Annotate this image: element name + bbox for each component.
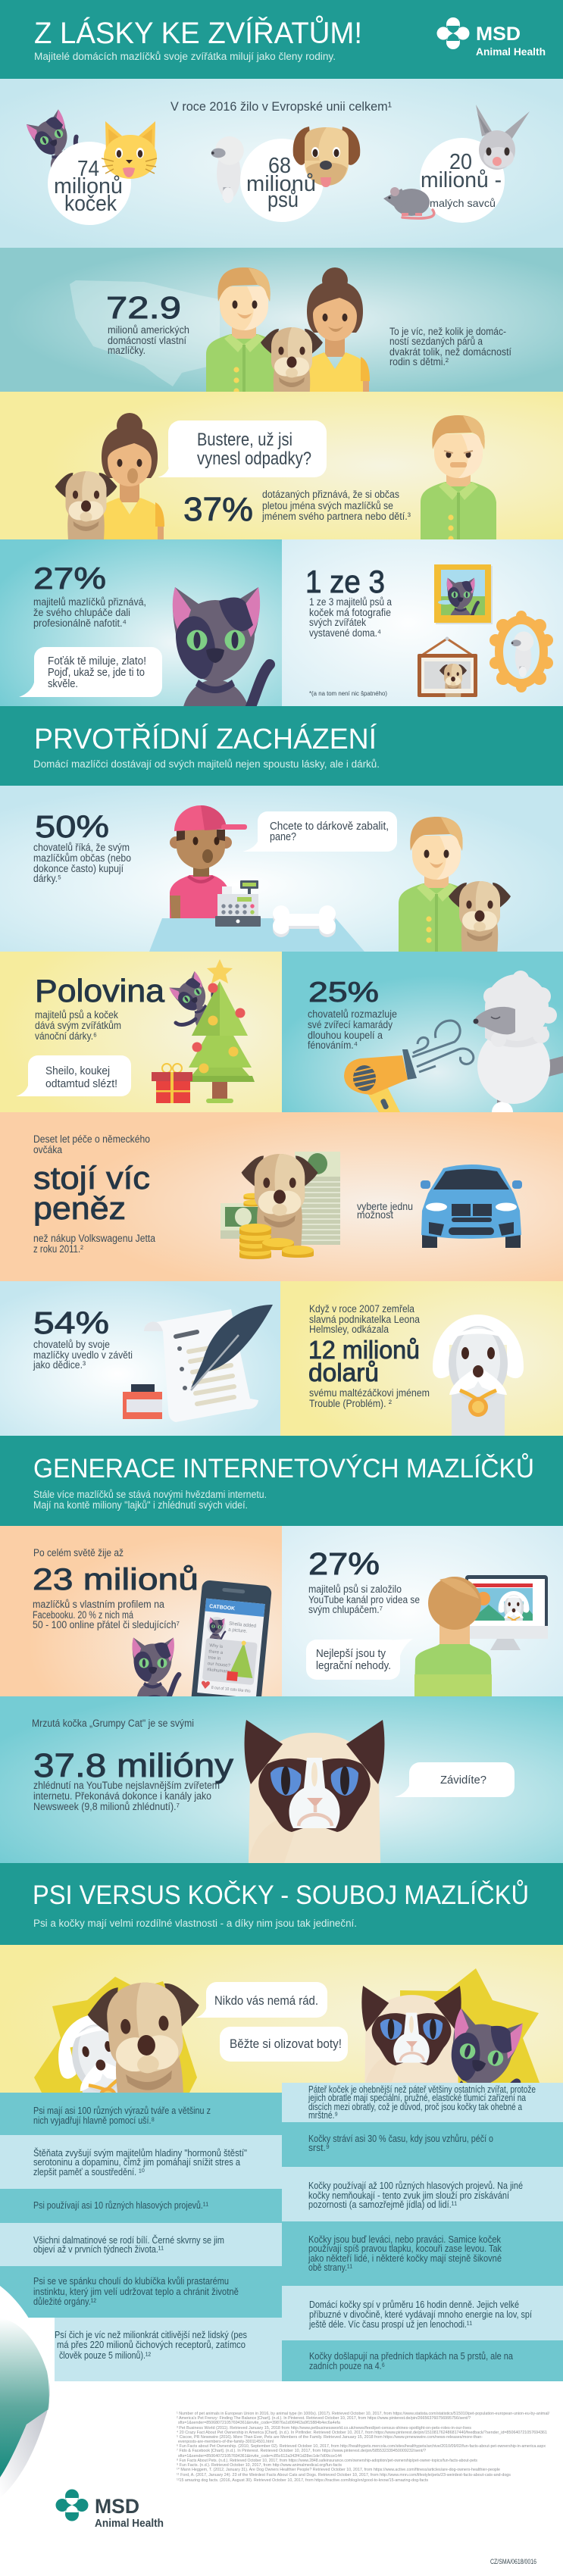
figure: maltese <box>49 2006 158 2151</box>
text: dog expressions: nich vyjadřují hlavně pomocí uší.⁸ <box>33 2115 155 2126</box>
text: 12 million dollars: Helmsley, odkázala <box>309 1324 389 1335</box>
text: comparison with households <box>389 326 511 367</box>
references list: sfts=1&sender=850680721057694361&invite_code=39876a1d06f463a9f15884b4ec6a4efa <box>178 2421 340 2425</box>
logo: MSD Animal Health: MSD <box>476 23 521 45</box>
stat: 20 million small mammals: malých savců <box>430 197 496 209</box>
stat: 23 million: Facebooku. 20 % z nich má <box>33 1609 133 1621</box>
stat: 50%: 50% <box>35 809 109 844</box>
stat: 27% photos <box>33 562 146 629</box>
panel: dogs versus cats duel <box>0 1945 563 2151</box>
text: comparison with households: rodin s dětmi.² <box>389 356 449 367</box>
speech bubble: camera: Foťák tě miluje, zlato! <box>48 655 146 667</box>
stat: 1 in 3 <box>305 564 392 639</box>
icon: rabbit head <box>479 130 515 170</box>
stat: 20 million small mammals <box>421 150 502 209</box>
text: flexible spine <box>308 2084 536 2121</box>
text: toes: Kočky došlapují na předních tlapkách na 5 prstů, ale na <box>309 2351 513 2362</box>
text: sense of smell <box>55 2330 247 2361</box>
text: 12 million dollars: slavná podnikatelka Leona <box>309 1314 420 1325</box>
speech bubble: Bustere: Bustere, už jsi <box>197 430 292 450</box>
decoration: left star burst <box>34 1977 197 2093</box>
heading: GENERACE INTERNETOVÝCH MAZLÍČKŮ <box>33 1453 534 1483</box>
stat: 74 million cats <box>54 157 123 216</box>
references list: sfts=1&sender=850640721057694361&invite_code=c85c612a342f41d28ec1de7d09cce144 <box>178 2454 342 2459</box>
icon: phone with Catbook: Why is <box>209 1643 223 1649</box>
panel: section header first-class treatment <box>0 706 563 786</box>
stat: half: dává svým zvířátkům <box>35 1020 121 1031</box>
panel: page header <box>0 0 563 79</box>
stat: 68 million dogs <box>246 154 316 212</box>
text: sleeping hours: Domácí kočky spí v průměru 16 hodin denně. Jejich velké <box>309 2299 519 2310</box>
subheading <box>33 1489 267 1511</box>
text: pick one option: možnost <box>357 1209 393 1221</box>
text: curling up <box>33 2276 239 2307</box>
speech bubble: Sheila <box>16 1055 131 1096</box>
text: dog vocalisations: Psi používají asi 10 různých hlasových projevů.¹¹ <box>33 2200 208 2211</box>
text: sense of smell: má přes 220 milionů čichových receptorů, zatímco <box>57 2340 246 2350</box>
speech bubble: funny accidents <box>306 1639 413 1680</box>
figure: cashier <box>170 805 247 918</box>
references list: evenposts-are-members-of-the-family-300114501.html <box>178 2440 274 2444</box>
stat: 72.9 million: mazlíčky. <box>108 345 145 356</box>
stat: 27% photos: profesionálně nafotit.⁴ <box>33 617 127 629</box>
panel: Grumpy Cat <box>0 1696 563 1863</box>
icon: phone with Catbook: a picture. <box>228 1627 248 1634</box>
panel: Christmas gifts <box>0 952 282 1112</box>
stat: 54%: jako dědice.³ <box>33 1359 86 1371</box>
icon: computer monitor <box>465 1575 548 1650</box>
stat: 50%: mazlíčkům občas (nebo <box>33 852 131 864</box>
stat: 20 million small mammals: milionů - <box>421 168 502 192</box>
speech bubble: funny accidents: Nejlepší jsou ty <box>316 1647 386 1660</box>
icon: phone with Catbook: our house? <box>208 1662 231 1668</box>
text: cat vocalisations <box>308 2181 523 2210</box>
text: curling up: důležité orgány.¹² <box>33 2296 96 2307</box>
icon: phone with Catbook: 8 out of 10 cats like this <box>211 1686 251 1694</box>
figure: maltese with medal <box>433 1315 524 1458</box>
references list: ³ Pet Business World (2011). Retrieved January 15, 2018 from http://www.petbusinessworld.co.uk/news/feed/pet-census-shines-spotlight-on-pets-roles-in-our-lives <box>177 2426 471 2431</box>
stat: 23 million <box>33 1547 199 1630</box>
references list: ¹¹ Ford, A. (2017, January 24). 23 of the Weirdest Facts About Cats and Dogs. Retrieved October 10, 2017, from http://www.mnn.com/lifestyle/pets/23-weirdest-facts-about-cats-and-dogs <box>177 2473 511 2478</box>
text: 12 million dollars: Trouble (Problém). ² <box>309 1398 392 1409</box>
icon: phone with Catbook: there a <box>208 1649 224 1655</box>
speech bubble: gift wrap <box>242 811 397 852</box>
stat: 74 million cats: koček <box>64 192 117 216</box>
icon: phone with Catbook: tree in <box>208 1655 221 1662</box>
figure: cat behind tree <box>168 969 226 1031</box>
icon: rat <box>383 187 434 218</box>
figure: man from behind <box>414 1577 492 1696</box>
stat: 27% photos: že svého chlupáče dali <box>33 607 130 618</box>
text: 12 million dollars <box>308 1303 430 1409</box>
stat: 37%: pletou jména svých mazlíčků se <box>262 500 393 511</box>
stat: 37.8 million views: 37.8 milióny <box>33 1747 233 1784</box>
text: pick one option <box>357 1201 413 1221</box>
stat: 23 million: 50 - 100 online přátel či sledujících⁷ <box>33 1619 180 1630</box>
text: puppies and hormones <box>33 2147 247 2177</box>
figure: man <box>206 267 274 392</box>
text: 12 million dollars: svému maltézáčkovi jménem <box>309 1387 430 1399</box>
figure: dark cat <box>173 587 275 706</box>
stat: 37.8 million views <box>32 1718 233 1812</box>
text: left and right pawed: obě strany.¹¹ <box>308 2262 352 2273</box>
panel: mixing up names <box>0 392 563 539</box>
stat: 23 million: 23 milionů <box>33 1563 199 1596</box>
figure: dog <box>449 881 511 957</box>
stat: 72.9 million: 72.9 <box>106 290 181 325</box>
icon: phone with Catbook: Sheila added <box>229 1621 257 1629</box>
stat: 27% YouTube <box>308 1546 420 1615</box>
speech bubble: Bustere <box>158 420 327 477</box>
stat: 27% YouTube: 27% <box>308 1546 380 1581</box>
panel: American households <box>0 248 563 392</box>
figure: poodle <box>473 971 563 1123</box>
text: costs more money: než nákup Volkswagenu Jetta <box>33 1233 155 1244</box>
references list: ⁷ Fido & Facebook [Chart]. (n.d.). In Pinterest. Retrieved October 10, 2017, from https://www.pinterest.de/pin/585532339450009232/sent/? <box>177 2449 426 2453</box>
logo: MSD Animal Health: Animal Health <box>476 45 546 58</box>
panel: gifts for pets <box>0 786 563 962</box>
stat: half: vánoční dárky.⁶ <box>35 1030 97 1042</box>
references list: ¹ Number of pet animals in European Union in 2016, by animal type (in 1000s). (2017). Retrieved October 10, 2017, from https://www.statista.com/statistics/515010/pet-population-european-union-eu-by-animal/ <box>177 2412 549 2416</box>
references list: ⁹ Fun Facts. (n.d.). Retrieved October 10, 2017, from http://www.animalmedical.org/fun-facts <box>177 2463 342 2468</box>
text: costs more money: ovčáka <box>33 1144 62 1155</box>
stat: 37%: jménem svého partnera nebo dětí.³ <box>261 511 411 522</box>
text: cat vocalisations: Kočky používají až 100 různých hlasových projevů. Na jiné <box>308 2181 523 2191</box>
stat: 37.8 million views: internetu. Překonává dokonce i kanály jako <box>33 1790 211 1802</box>
text: dalmatians: objeví až v prvních týdnech života.¹¹ <box>33 2244 164 2255</box>
panel: Facebook profiles <box>0 1526 282 1711</box>
subheading: Mají na kontě miliony "lajků" i zhlédnutí svých videí. <box>33 1499 248 1511</box>
speech bubble: camera: Pojď, ukaž se, jde ti to <box>48 666 145 679</box>
speech bubble: go lick boots <box>220 2027 348 2062</box>
text: curling up: instinktu, který jim velí udržovat teplo a chránit životně <box>33 2287 239 2297</box>
text: sleeping hours: ještě déle. Víc času prospí už jen lenochodi.¹¹ <box>308 2319 472 2330</box>
text: dog expressions <box>33 2106 211 2126</box>
subtitle: Majitelé domácích mazlíčků svoje zvířátka milují jako členy rodiny. <box>34 51 336 62</box>
heading: PSI VERSUS KOČKY - SOUBOJ MAZLÍČKŮ <box>33 1880 529 1910</box>
references list: ⁴ 20 Crazy Fact About Pet Ownership in America [Chart]. (n.d.). In Pinfinder. Retrieved October 10, 2017, from https://www.pinterest.de/pin/151081762486817440/feedback/?sender_id=850640721057694361 <box>177 2431 547 2435</box>
icon: ornate mirror with poodle <box>489 611 553 692</box>
stat: 37.8 million views: Mrzutá kočka „Grumpy Cat" je se svými <box>32 1718 194 1729</box>
icon: ink bottle <box>123 1384 162 1419</box>
document code: CZ/SMA/0618/0016 <box>490 2558 536 2565</box>
text: 12 million dollars: 12 milionů <box>308 1336 420 1364</box>
stat: 72.9 million: domácností vlastní <box>108 335 186 346</box>
speech bubble: envy <box>394 1762 515 1797</box>
stat: 23 million: Po celém světě žije až <box>33 1547 124 1558</box>
stat: 20 million small mammals: 20 <box>449 150 472 174</box>
stat: 1 in 3: koček má fotografie <box>309 607 391 618</box>
heading: EU pets: V roce 2016 žilo v Evropské unii celkem¹ <box>170 99 392 114</box>
speech bubble: gift wrap: pane? <box>270 830 296 843</box>
stat: 1 in 3: svých zvířátek <box>309 617 366 628</box>
stat: 37%: 37% <box>183 491 253 528</box>
stat: 68 million dogs: psů <box>267 188 299 212</box>
icon: dog head <box>293 127 360 187</box>
stat: 68 million dogs: milionů <box>246 172 316 196</box>
panel: professional photos <box>0 539 282 706</box>
map: USA silhouette <box>70 280 220 386</box>
references list: ¹²15 amazing dog facts. (2016, August 30). Retrieved October 10, 2017, from https://tractive.com/blog/en/good-to-know/15-amazing-dog-facts <box>177 2478 428 2483</box>
stat: 74 million cats: milionů <box>54 174 123 199</box>
text: comparison with households: dvakrát tolik, než domácností <box>389 346 511 358</box>
icon: dark cat peeking <box>26 108 88 180</box>
stat: 27% YouTube: svým chlupáčem.⁷ <box>308 1604 383 1615</box>
stat: 25%: dlouhou koupelí a <box>308 1030 383 1041</box>
panel: grooming <box>282 952 563 1123</box>
text: comparison with households: ností sezdaných párů a <box>389 336 483 347</box>
text: left and right pawed: jako někteří lidé, i některé kočky mají stejně šikovné <box>308 2253 502 2264</box>
stat: 54%: 54% <box>33 1305 109 1340</box>
counter <box>149 918 364 952</box>
logo: MSD Animal Health footer <box>56 2490 164 2530</box>
text: costs more money: z roku 2011.² <box>33 1243 83 1255</box>
stat: 27% photos: majitelů mazlíčků přiznává, <box>33 596 146 608</box>
icon: gift <box>152 1064 192 1103</box>
speech bubble: nobody likes you <box>195 1982 327 2018</box>
logo: MSD Animal Health footer: Animal Health <box>95 2518 164 2530</box>
speech bubble: camera: skvěle. <box>48 677 78 690</box>
text: 12 million dollars: Když v roce 2007 zemřela <box>309 1303 414 1315</box>
stat: 37%: dotázaných přiznává, že si občas <box>262 489 399 500</box>
icon: Christmas tree <box>186 959 255 1103</box>
stat: 50%: chovatelů říká, že svým <box>33 842 130 853</box>
references list: ⁵ Ciscoe, PR Newswire (2016). More Than Ever, Pets are Members of the Family. Retrieved January 15, 2018 from https://www.prnewswire.com/news-releases/more-than- <box>177 2435 483 2440</box>
text: costs more money: Deset let péče o německého <box>33 1133 150 1145</box>
text: pick one option: vyberte jednu <box>357 1201 413 1212</box>
speech bubble: Bustere: vynesl odpadky? <box>197 449 311 469</box>
panel: section header dogs vs cats <box>0 1863 563 1945</box>
references list <box>177 2412 549 2483</box>
references list: ² America's Pet Frenzy: Finding The Balance [Chart]. (n.d.). In Pinterest. Retrieved October 10, 2017, from https://www.pinterest.de/pin/266563760756995756/sent/? <box>177 2416 471 2421</box>
stat: 37% <box>184 490 411 522</box>
title: Z LÁSKY KE ZVÍŘATŮM! <box>34 14 362 50</box>
stat: 25%: fénováním.⁴ <box>308 1039 358 1051</box>
speech bubble: envy: Závidíte? <box>440 1774 486 1787</box>
stat: 72.9 million: milionů amerických <box>108 324 189 336</box>
figure: woman speaking <box>102 413 164 539</box>
stat: 1 in 3: 1 ze 3 <box>305 564 385 599</box>
stat: half: majitelů psů a koček <box>35 1009 118 1021</box>
text: curling up: Psi se ve spánku choulí do klubíčka kvůli prastarému <box>33 2276 229 2287</box>
figure: Grumpy Cat <box>361 1986 461 2087</box>
decoration: right star burst <box>400 1968 540 2083</box>
speech bubble: funny accidents: legrační nehody. <box>316 1659 391 1672</box>
figure: Grumpy Cat <box>245 1720 384 1863</box>
text: flexible spine: mrštné.⁹ <box>308 2110 338 2121</box>
icon: quill feather <box>191 1305 273 1390</box>
speech bubble: go lick boots: Běžte si olizovat boty! <box>230 2037 342 2051</box>
speech bubble: camera <box>19 647 162 697</box>
stat: 25% <box>308 982 397 1049</box>
icon: phone with Catbook: #kohumans <box>207 1668 230 1674</box>
logo: MSD Animal Health footer: MSD <box>95 2495 139 2518</box>
figure: man frowning <box>421 415 496 539</box>
stat: 74 million cats: 74 <box>77 157 99 181</box>
speech bubble: Sheila: Sheilo, koukej <box>45 1064 110 1077</box>
stat: 37.8 million views: zhlédnutí na YouTube nejslavnějším zvířetem <box>33 1780 220 1791</box>
heading: PRVOTŘÍDNÍ ZACHÁZENÍ <box>34 723 377 755</box>
text: grooming time: srst.⁹ <box>308 2143 330 2153</box>
icon: scroll testament <box>144 1309 258 1422</box>
panel: YouTube channels <box>282 1526 563 1696</box>
stat: 27% YouTube: YouTube kanál pro videa se <box>308 1594 420 1605</box>
text: costs more money: peněz <box>33 1190 126 1226</box>
stat: 25%: 25% <box>308 977 379 1008</box>
icon: framed cat photo <box>434 564 493 624</box>
text: comparison with households: To je víc, než kolik je domác- <box>389 326 506 337</box>
stat: half: Polovina <box>35 973 165 1008</box>
stat: 50%: dárky.⁵ <box>33 873 61 884</box>
illustration: dog with money <box>221 1152 340 1259</box>
stat: 72.9 million <box>108 296 189 356</box>
panel: cost of a German shepherd <box>0 1112 563 1281</box>
figure: customer <box>399 817 463 952</box>
stat: 27% photos: 27% <box>33 562 106 596</box>
footnote: nothing wrong: *(a na tom není nic špatného) <box>309 689 387 697</box>
text: sleeping hours <box>308 2299 532 2330</box>
text: left and right pawed: používají spíš pravou tlapku, kocouři zase levou. Tak <box>308 2243 502 2254</box>
speech bubble: Sheila: odtamtud slézt! <box>45 1077 117 1090</box>
references list: ⁸ Fun Facts About Pets. (n.d.). Retrieved October 10, 2017, from https://www.2848.safeinsurance.com/ownership-adoption/pet-ownership/pet-owner-topics/fun-facts-about-pets <box>177 2459 477 2463</box>
figure: big dog <box>85 1978 208 2124</box>
figure: dog <box>55 471 117 547</box>
text: costs more money <box>33 1133 155 1255</box>
text: left and right pawed <box>308 2234 502 2273</box>
decoration: left swoosh <box>0 2286 51 2498</box>
text: puppies and hormones: serotoninu a dopaminu, čímž jim pomáhají snížit stres a <box>33 2157 240 2168</box>
subheading: Domácí mazlíčci dostávají od svých majitelů nejen spoustu lásky, ale i dárků. <box>33 758 380 770</box>
icon: phone with Catbook: CATBOOK <box>209 1604 235 1612</box>
text: 12 million dollars: dolarů <box>308 1358 379 1386</box>
panel: cat facts <box>282 2083 563 2381</box>
stat: half <box>35 973 165 1042</box>
icon: rabbit ears <box>476 105 530 139</box>
icon: poodle <box>211 136 244 203</box>
text: dalmatians: Všichni dalmatinové se rodí bílí. Černé skvrny se jim <box>33 2234 224 2246</box>
icon: cash register <box>215 880 261 927</box>
references list: ¹⁰ Mann Heggem, T. (2012, January 31). Are Dog Owners Healthier People? Retrieved October 10, 2017, from https://www.active.com/fitness/articles/are-dog-owners-healthier-people <box>177 2467 500 2472</box>
figure: cat <box>133 1637 179 1707</box>
subheading: Stále více mazlíčků se stává novými hvězdami internetu. <box>33 1489 267 1500</box>
icon: yellow cat head <box>102 121 157 179</box>
text: toes <box>309 2351 513 2371</box>
stat: 68 million dogs: 68 <box>268 154 291 178</box>
icon: bone <box>273 905 336 937</box>
panel: photos at home <box>282 539 563 706</box>
text: costs more money: stojí víc <box>33 1160 150 1196</box>
circle: small mammals <box>420 138 505 223</box>
figure: woman <box>307 267 370 392</box>
text: puppies and hormones: Štěňata zvyšují svým majitelům hladiny "hormonů štěstí" <box>33 2147 247 2159</box>
stat: 23 million: mazlíčků s vlastním profilem na <box>33 1599 164 1610</box>
logo: MSD Animal Health <box>436 17 546 58</box>
stat: 1 in 3: vystavené doma.⁴ <box>309 627 381 639</box>
stat: 54% <box>33 1305 133 1371</box>
text: sleeping hours: příbuzné v divočině, které vydávají mnoho energie na lov, spí <box>309 2309 532 2320</box>
stat: 37.8 million views: Newsweek (9,8 milionů zhlédnutí).⁷ <box>33 1801 180 1812</box>
figure: dog <box>261 327 323 392</box>
illustration: blue car <box>421 1165 522 1248</box>
text: grooming time <box>308 2134 493 2153</box>
text: puppies and hormones: zlepšit paměť a soustředění. ¹⁰ <box>33 2167 145 2177</box>
stat: 25%: chovatelů rozmazluje <box>308 1008 397 1020</box>
stat: 54%: chovatelů by svoje <box>33 1339 110 1350</box>
text: sense of smell: člověk pouze 5 milionů).¹² <box>59 2350 151 2361</box>
panel: Leona Helmsley <box>280 1281 563 1458</box>
text: grooming time: Kočky stráví asi 30 % času, kdy jsou vzhůru, péčí o <box>308 2134 493 2144</box>
stat: 1 in 3: 1 ze 3 majitelů psů a <box>309 596 392 608</box>
subheading: Psi a kočky mají velmi rozdílné vlastnosti - a díky nim jsou tak jedineční. <box>33 1918 357 1929</box>
stat: 27% YouTube: majitelů psů si založilo <box>308 1583 402 1595</box>
panel: dog facts <box>0 2093 282 2381</box>
text: dalmatians <box>33 2234 224 2255</box>
text: sense of smell: Psí čich je víc než milionkrát citlivější než lidský (pes <box>55 2330 247 2340</box>
circle: cats <box>48 142 131 225</box>
stat: 50%: dokonce často) kupují <box>33 863 124 874</box>
speech bubble: gift wrap: Chcete to dárkově zabalit, <box>270 820 389 833</box>
stat: 50% <box>33 809 131 884</box>
panel: inheritance <box>0 1281 280 1436</box>
panel: section header internet generation <box>0 1436 563 1526</box>
speech bubble: nobody likes you: Nikdo vás nemá rád. <box>214 1994 318 2008</box>
stat: 25%: své zvířecí kamarády <box>308 1019 393 1030</box>
text: cat vocalisations: pozornosti (a samozřejmě jídla) od lidí.¹¹ <box>308 2199 457 2210</box>
text: cat vocalisations: kočky nemňoukají - tento zvuk jim slouží pro získávání <box>308 2190 509 2201</box>
icon: phone with Catbook <box>191 1580 272 1711</box>
circle: dogs <box>240 139 324 222</box>
panel: pets in the EU <box>0 79 563 248</box>
text: left and right pawed: Kočky jsou buď leváci, nebo praváci. Samice koček <box>308 2234 502 2245</box>
stat: 54%: mazlíčky uvedlo v závěti <box>33 1349 133 1361</box>
icon: framed dog photo <box>418 636 477 697</box>
text: toes: zadních pouze na 4.⁶ <box>309 2361 385 2371</box>
figure: dark cat <box>433 2008 531 2132</box>
references list: ⁶ Fun Facts about Pet Ownership. (2010, September 02). Retrieved October 10, 2017, from http://healthypets.mercola.com/sites/healthypets/archive/2010/09/02/fun-facts-about-pet-ownership-in-america.aspx <box>177 2444 546 2449</box>
icon: hair dryer and air stream <box>344 1021 474 1112</box>
text: dog expressions: Psi mají asi 100 různých výrazů tváře a většinu z <box>33 2106 211 2116</box>
